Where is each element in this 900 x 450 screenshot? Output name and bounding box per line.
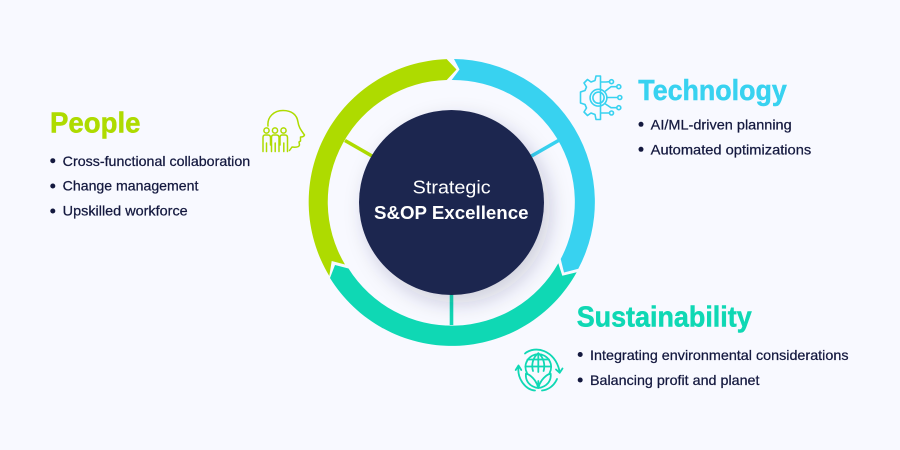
heading: people: People: [50, 108, 140, 140]
icon: globe with leaves: [516, 350, 562, 390]
ring segment: people: [309, 59, 456, 276]
ring segment: technology: [452, 59, 595, 272]
spoke: technology: [532, 140, 558, 156]
bullet list: people: Upskilled workforce: [63, 203, 188, 219]
bullet list: sustainability: Integrating environmental considerations: [590, 347, 848, 363]
bullet list: technology: Automated optimizations: [651, 142, 811, 158]
panel: technology: [638, 75, 811, 158]
bullet list: sustainability: Balancing profit and planet: [590, 372, 760, 388]
center text: [374, 177, 528, 223]
bullet list: people: [50, 153, 250, 219]
ring diagram: [309, 59, 595, 346]
panel: sustainability: [577, 302, 848, 388]
bullet list: technology: AI/ML-driven planning: [651, 116, 792, 132]
ring segment: sustainability: [330, 263, 577, 346]
center text: S&OP Excellence: [374, 202, 528, 223]
center circle: [359, 110, 544, 295]
spoke: sustainability: [450, 290, 453, 325]
bullet list: sustainability: [578, 347, 848, 388]
center text: Strategic: [413, 177, 491, 197]
bullet list: technology: [638, 116, 811, 158]
icon: gear with circuit: [580, 76, 622, 120]
bullet list: people: Change management: [63, 178, 199, 194]
heading: sustainability: Sustainability: [577, 302, 752, 334]
bullet list: people: Cross-functional collaboration: [63, 153, 250, 169]
icon: people and head: [263, 110, 304, 152]
spoke: people: [345, 140, 372, 156]
panel: people: [50, 108, 250, 219]
heading: technology: Technology: [638, 75, 787, 107]
